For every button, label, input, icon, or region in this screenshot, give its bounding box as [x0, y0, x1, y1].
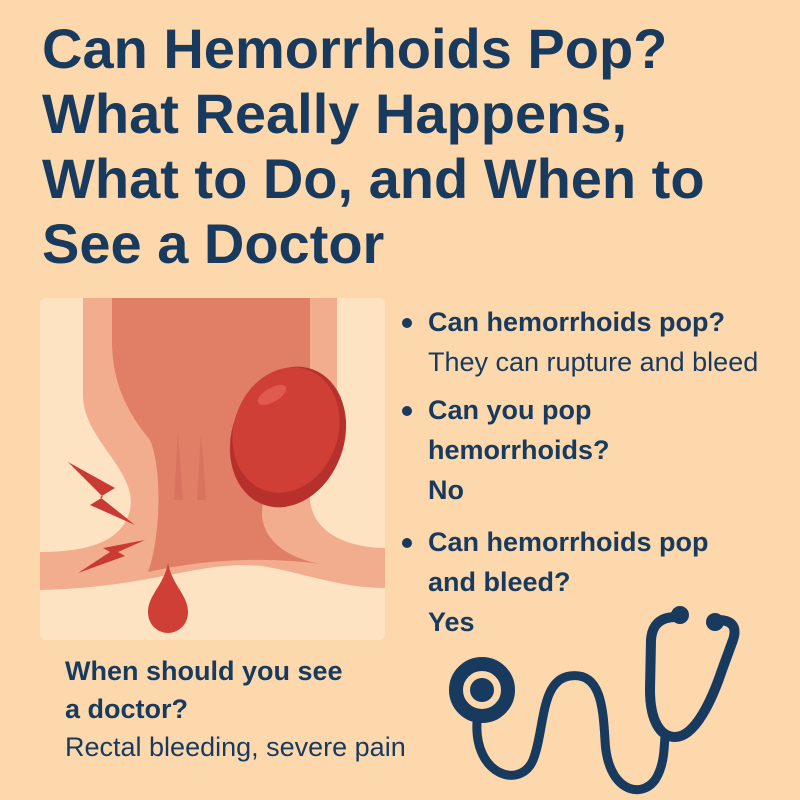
icon: pain bolts: [68, 462, 145, 573]
title: See a Doctor: [42, 212, 384, 275]
hemorrhoid lump: [211, 350, 365, 524]
bullet list: [402, 307, 758, 637]
text: They can rupture and bleed: [428, 347, 758, 377]
doctor section: When should you see: [65, 656, 343, 686]
title: What Really Happens,: [42, 82, 627, 145]
icon: blood drop: [148, 563, 188, 633]
title: What to Do, and When to: [42, 147, 705, 210]
doctor section: [65, 656, 406, 762]
text: hemorrhoids?: [428, 435, 610, 465]
icon: stethoscope: [456, 606, 735, 790]
text: Can hemorrhoids pop?: [428, 307, 725, 337]
doctor section: Rectal bleeding, severe pain: [65, 732, 406, 762]
text: Yes: [428, 607, 475, 637]
title: [42, 17, 705, 275]
title: Can Hemorrhoids Pop?: [42, 17, 667, 80]
text: Can hemorrhoids pop: [428, 527, 709, 557]
text: and bleed?: [428, 567, 571, 597]
text: No: [428, 475, 464, 505]
doctor section: a doctor?: [65, 694, 188, 724]
text: Can you pop: [428, 395, 592, 425]
